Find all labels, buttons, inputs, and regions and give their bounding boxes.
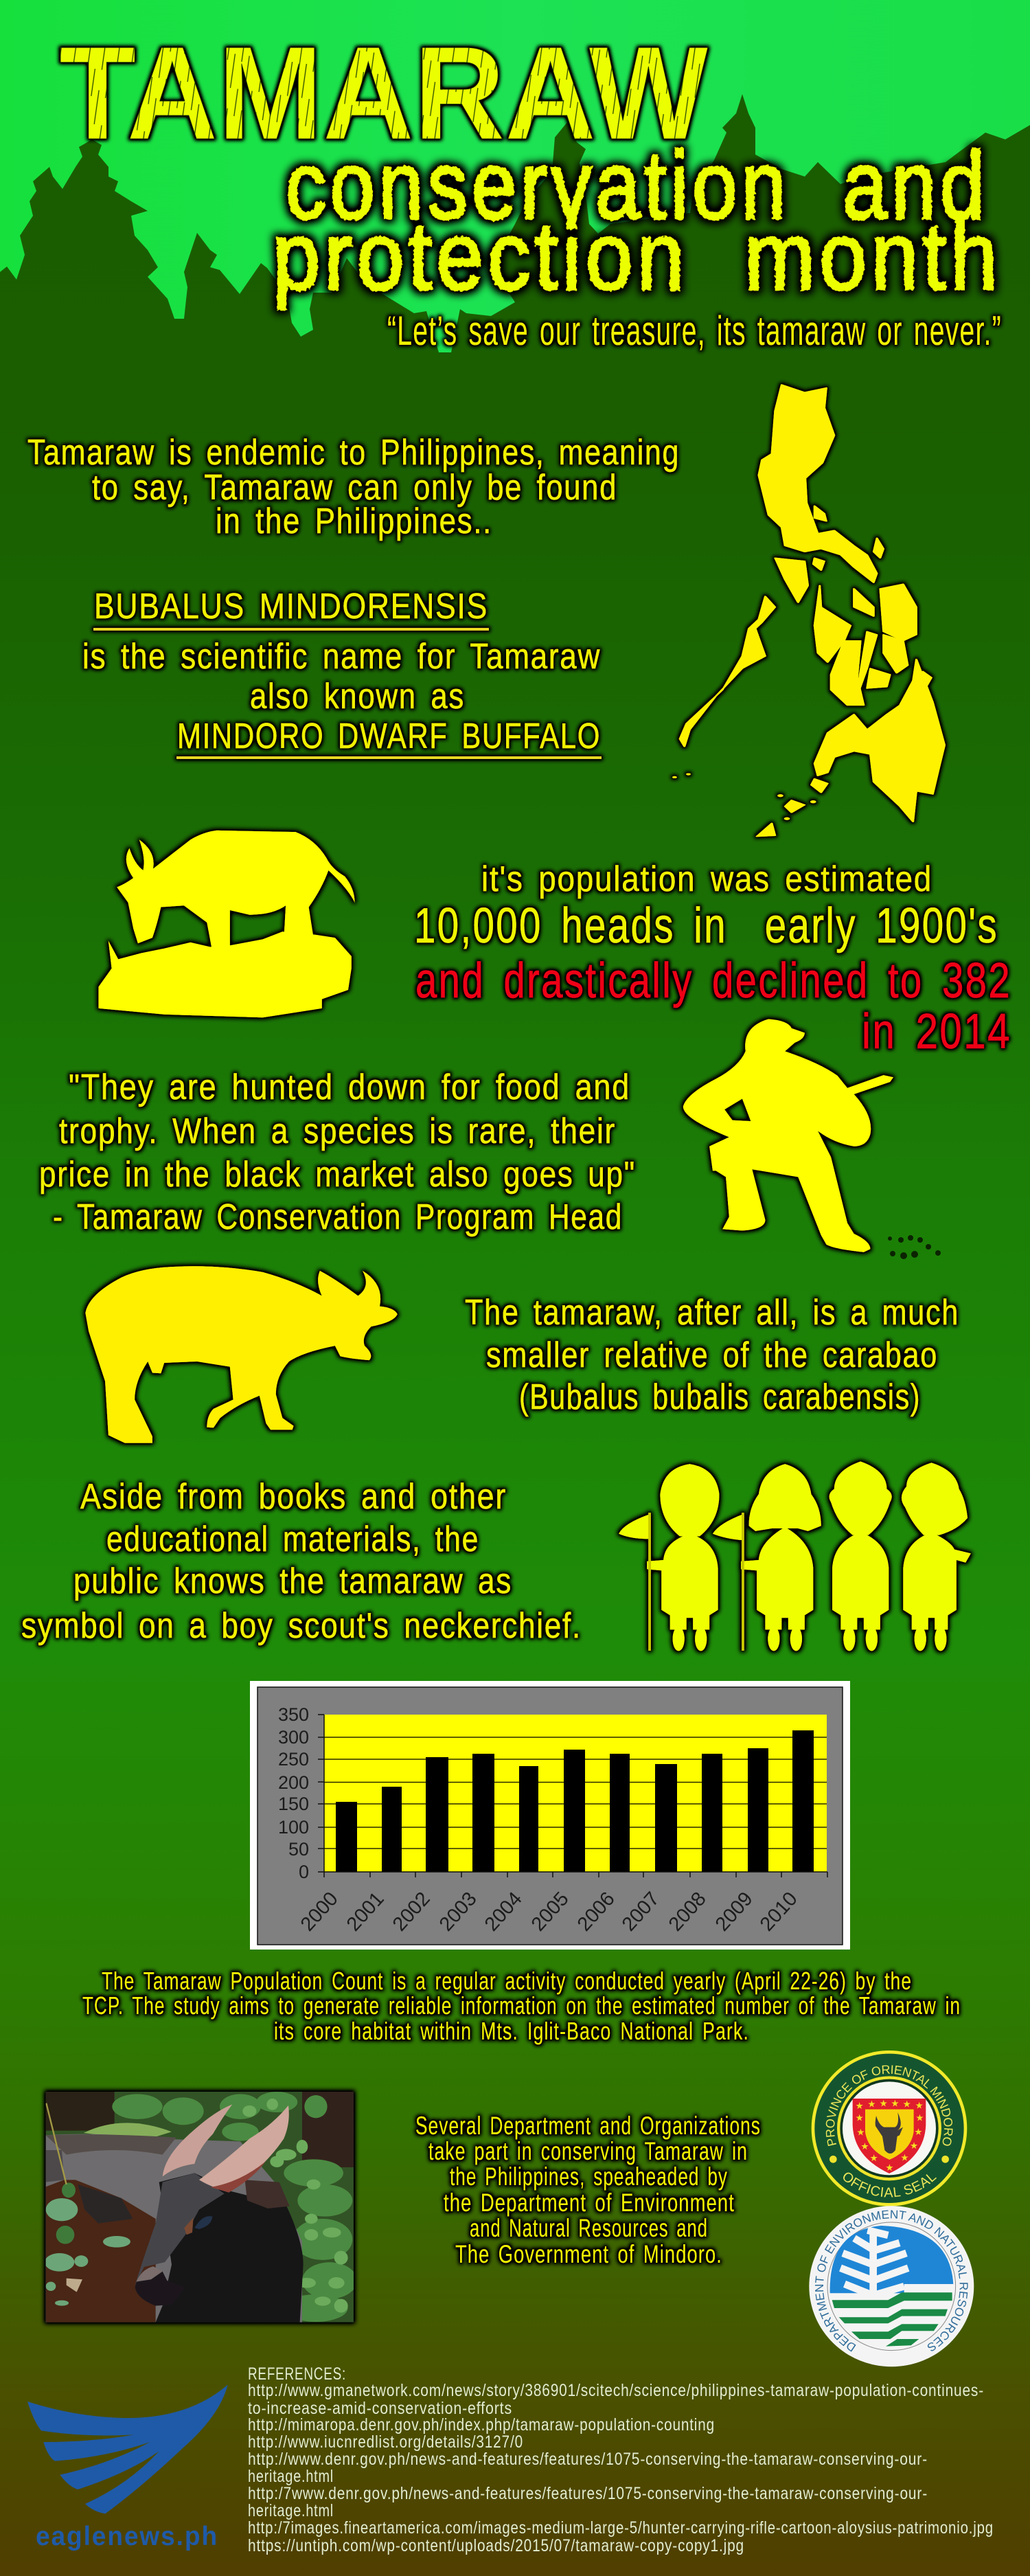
horns (163, 2104, 232, 2176)
x axis labels: 2006 (573, 1888, 619, 1936)
x axis labels: 2000 (297, 1888, 343, 1936)
text block: population estimate: it's population was estimated (481, 859, 932, 899)
y axis labels: 350 (278, 1704, 309, 1725)
small dark specks (888, 1235, 941, 1259)
text block: endemic statement: to say, Tamaraw can only be found (92, 468, 617, 508)
text block: population estimate (414, 859, 998, 953)
references list: heritage.html (248, 2467, 334, 2486)
map of the Philippines (674, 385, 945, 837)
foreground leaves (45, 2182, 130, 2306)
text block: hunting quote: price in the black market also goes up" (39, 1155, 636, 1195)
references list (248, 2364, 994, 2555)
logo: Province of Oriental Mindoro seal: ★ (856, 2127, 865, 2138)
text block: decline in red (415, 953, 1011, 1059)
text block: participating organizations: take part in conserving Tamaraw in (428, 2137, 748, 2165)
icon: standing tamaraw (85, 1266, 398, 1443)
x axis labels: 2010 (756, 1888, 802, 1936)
icon: hunter with rifle (683, 1019, 893, 1252)
references list: http://mimaropa.denr.gov.ph/index.php/tamaraw-population-counting (248, 2415, 715, 2434)
x axis labels: 2002 (389, 1888, 435, 1936)
text block: participating organizations: and Natural Resources and (470, 2214, 708, 2242)
text block: boy scout neckerchief: educational materials, the (106, 1519, 479, 1559)
text block: carabao relative (465, 1293, 959, 1417)
text block: boy scout neckerchief (21, 1477, 582, 1646)
logo: Province of Oriental Mindoro seal (812, 2050, 967, 2206)
logo: Province of Oriental Mindoro seal: ★ (885, 2162, 893, 2173)
logo: Province of Oriental Mindoro seal: ★ (856, 2112, 864, 2123)
text block: boy scout neckerchief: public knows the tamaraw as (73, 1561, 512, 1601)
logo: Province of Oriental Mindoro seal: ★ (880, 2099, 888, 2109)
y axis labels: 300 (278, 1727, 309, 1748)
y axis labels: 0 (299, 1862, 309, 1882)
y axis labels: 250 (278, 1749, 309, 1770)
logo: Province of Oriental Mindoro seal: ★ (860, 2141, 869, 2151)
logo: DENR seal: DEPARTMENT OF ENVIRONMENT AND NATURAL RESOURCES (815, 2210, 968, 2352)
text block: scientific name: BUBALUS MINDORENSIS (94, 587, 488, 626)
references list: https://untiph.com/wp-content/uploads/2015/07/tamaraw-copy-copy1.jpg (248, 2536, 744, 2555)
x axis labels: 2009 (711, 1888, 757, 1936)
logo: Province of Oriental Mindoro seal: ★ (915, 2100, 924, 2110)
logo: Province of Oriental Mindoro seal: ★ (910, 2140, 918, 2151)
y axis labels: 200 (278, 1772, 309, 1793)
text block: carabao relative: smaller relative of the carabao (486, 1335, 938, 1375)
logo: eaglenews.ph (27, 2385, 228, 2551)
text block: population count caption: its core habitat within Mts. Iglit-Baco National Park. (274, 2017, 749, 2045)
x axis labels: 2004 (481, 1888, 527, 1936)
text block: scientific name: MINDORO DWARF BUFFALO (177, 716, 601, 756)
logo: Province of Oriental Mindoro seal: ★ (891, 2099, 899, 2109)
text block: participating organizations: The Government of Mindoro. (455, 2240, 722, 2268)
references list: to-increase-amid-conservation-efforts (248, 2399, 512, 2418)
icon: grazing tamaraw (98, 831, 355, 1017)
text block: participating organizations: Several Department and Organizations (415, 2112, 761, 2140)
text block: scientific name: also known as (250, 677, 465, 716)
text block: hunting quote (39, 1067, 636, 1237)
logo: Province of Oriental Mindoro seal: ★ (856, 2101, 864, 2111)
x axis labels: 2007 (618, 1888, 664, 1936)
logo: eaglenews.ph: eaglenews.ph (36, 2522, 218, 2551)
text block: scientific name: is the scientific name for Tamaraw (82, 637, 601, 677)
text block: population count caption (82, 1967, 961, 2045)
references list: http://www.iucnredlist.org/details/3127/0 (248, 2432, 523, 2452)
logo: Province of Oriental Mindoro seal: ★ (903, 2099, 911, 2109)
y axis labels (278, 1704, 309, 1882)
text block: boy scout neckerchief: symbol on a boy scout's neckerchief. (21, 1606, 582, 1646)
x axis labels: 2001 (343, 1888, 389, 1936)
x axis labels: 2003 (435, 1888, 481, 1936)
icon: four boy scouts (619, 1461, 971, 1651)
text block: endemic statement (27, 433, 680, 541)
logo: Province of Oriental Mindoro seal: OFFICIAL SEAL (843, 2172, 937, 2197)
title: TAMARAW: TAMARAW (59, 19, 708, 167)
logo: Province of Oriental Mindoro seal: ★ (867, 2099, 876, 2109)
bars (336, 1730, 814, 1872)
y axis labels: 100 (278, 1817, 309, 1838)
y axis labels: 150 (278, 1794, 309, 1814)
text block: hunting quote: trophy. When a species is rare, their (59, 1111, 616, 1151)
x axis labels: 2005 (527, 1888, 573, 1936)
text block: participating organizations: the Philippines, speaheaded by (450, 2162, 728, 2191)
references list: REFERENCES: (248, 2364, 346, 2384)
text block: hunting quote: - Tamaraw Conservation Program Head (53, 1197, 623, 1237)
text block: boy scout neckerchief: Aside from books and other (80, 1477, 507, 1517)
logo: Province of Oriental Mindoro seal: ★ (914, 2127, 922, 2137)
text block: endemic statement: in the Philippines.. (216, 501, 492, 541)
logo: Province of Oriental Mindoro seal: PROVINCE OF ORIENTAL MINDORO (825, 2065, 953, 2146)
y axis labels: 50 (288, 1839, 309, 1860)
text block: hunting quote: "They are hunted down for food and (69, 1067, 630, 1107)
header sky with forest silhouette (0, 0, 1030, 352)
text block: participating organizations (415, 2112, 761, 2268)
x axis labels (297, 1888, 802, 1936)
shield (853, 2099, 926, 2173)
logo: Province of Oriental Mindoro seal: ★ (900, 2152, 908, 2162)
photo: tamaraw head (45, 2092, 357, 2323)
text block: carabao relative: (Bubalus bubalis carabensis) (519, 1377, 921, 1417)
text block: endemic statement: Tamaraw is endemic to Philippines, meaning (27, 433, 680, 473)
logo: Province of Oriental Mindoro seal: ★ (870, 2153, 878, 2163)
x axis labels: 2008 (665, 1888, 711, 1936)
logo: Province of Oriental Mindoro seal: ★ (915, 2112, 924, 2123)
references list: heritage.html (248, 2501, 334, 2520)
subtitle (273, 131, 1002, 310)
text block: scientific name (82, 587, 602, 759)
bar chart: population count 2000-2010 (250, 1681, 850, 1950)
text block: participating organizations: the Department of Environment (444, 2189, 735, 2217)
